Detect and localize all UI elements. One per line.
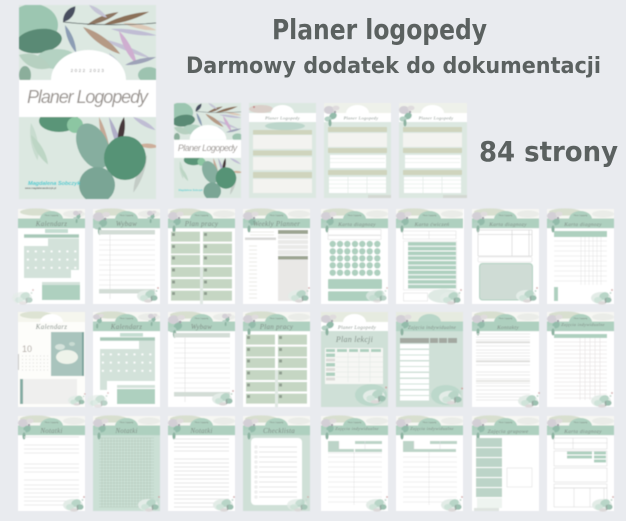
panel: daily plan grid page: Plan pracy: [184, 220, 219, 228]
panel: small cover: Magdalena Sobczyk: [178, 188, 203, 192]
panel: exercise list page: Karta ćwiczeń: [414, 222, 449, 228]
panel: notes form with floral background: Planer Logopedy: [264, 116, 300, 120]
panel: calendar page: [12, 208, 85, 305]
panel: attendance table page: [547, 208, 614, 305]
panel: lesson plan page: Plan lekcji: [335, 335, 373, 344]
panel: therapy form three sections: [324, 103, 391, 198]
panel: contacts page: [472, 311, 540, 408]
panel: table and dotted area page: [472, 208, 539, 304]
panel: lesson plan page: [321, 312, 388, 407]
panel: attendance table page: Karta diagnozy: [563, 222, 602, 228]
panel: weekly schedule page two: Wybaw: [191, 323, 212, 331]
panel: diagnosis form page: [547, 415, 614, 512]
page count callout: 84 strony: [479, 135, 618, 168]
panel: green calendar page: Kalendarz: [110, 323, 142, 331]
panel: diagnosis form page: Karta diagnozy: [563, 429, 602, 435]
subtitle: Darmowy dodatek do dokumentacji: [186, 53, 601, 79]
panel: lesson plan page: Planer Logopedy: [337, 326, 377, 331]
panel: table and dotted area page: Karta diagnozy: [488, 222, 527, 228]
panel: weekly planner page: Weekly Planner: [253, 220, 300, 228]
panel: notes grid page: [93, 415, 160, 512]
panel: group lessons page: [472, 415, 539, 511]
panel: individual lessons second table page: Zajęcia indywidualne: [410, 426, 454, 431]
panel: photo calendar page: [18, 311, 86, 407]
panel: notes lined page two: Notatki: [189, 427, 213, 435]
panel: weekly planner page: [243, 208, 310, 304]
flower photo: [51, 332, 84, 376]
panel: weekly schedule page two: [168, 311, 235, 407]
panel: individual lessons attendance page: [321, 415, 388, 512]
panel: speech sounds circles page: [321, 208, 388, 304]
cover author: Magdalena Sobczyk: [28, 181, 81, 187]
panel: notes lined page two: [168, 415, 235, 512]
panel: therapy form three sections: Planer Logopedy: [343, 116, 378, 120]
panel: therapy form with blank section: Planer Logopedy: [418, 116, 453, 120]
panel: attendance table page two: [547, 311, 614, 408]
panel: individual lessons table page: [396, 312, 463, 407]
panel: notes lined page: Notatki: [39, 427, 63, 435]
panel: photo calendar page: 10: [22, 344, 32, 354]
panel: large cover: 2022 2023: [71, 68, 105, 73]
panel: notes form with floral background: [249, 103, 316, 198]
panel: daily plan grid page two: Plan pracy: [259, 323, 294, 331]
panel: individual lessons table page: Zajęcia indywidualne: [408, 326, 457, 331]
panel: individual lessons attendance page: Zajęcia indywidualne: [335, 426, 379, 431]
panel: therapy form with blank section: [399, 103, 467, 198]
cover script title: Planer Logopedy: [27, 87, 149, 107]
panel: weekly schedule page: Wybaw: [116, 220, 137, 228]
panel: calendar page: Kalendarz: [35, 220, 67, 228]
panel: photo calendar page: Kalendarz: [35, 323, 67, 331]
title: Planer logopedy: [272, 13, 487, 46]
panel: notes grid page: Notatki: [114, 427, 138, 435]
panel: checklist page: [243, 415, 310, 512]
panel: checklist page: Checklista: [263, 427, 295, 435]
panel: green calendar page: [87, 311, 160, 408]
panel: attendance table page two: Zajęcia indywidualne: [561, 322, 605, 327]
panel: small cover: Planer Logopedy: [178, 143, 238, 153]
panel: weekly schedule page: [93, 208, 160, 304]
panel: contacts page: Kontakty: [496, 325, 519, 331]
panel: notes lined page: [18, 415, 85, 512]
panel: large cover: www.magdalenasobczyk.pl: [25, 186, 57, 190]
panel: exercise list page: [396, 208, 464, 305]
panel: individual lessons second table page: [396, 415, 463, 512]
panel: small cover: [169, 102, 243, 203]
panel: daily plan grid page: [168, 208, 235, 304]
panel: daily plan grid page two: [243, 311, 310, 407]
panel: group lessons page: Zajęcia grupowe: [488, 429, 529, 435]
panel: speech sounds circles page: Karta diagnozy: [337, 222, 376, 228]
panel: large cover: [8, 3, 160, 208]
